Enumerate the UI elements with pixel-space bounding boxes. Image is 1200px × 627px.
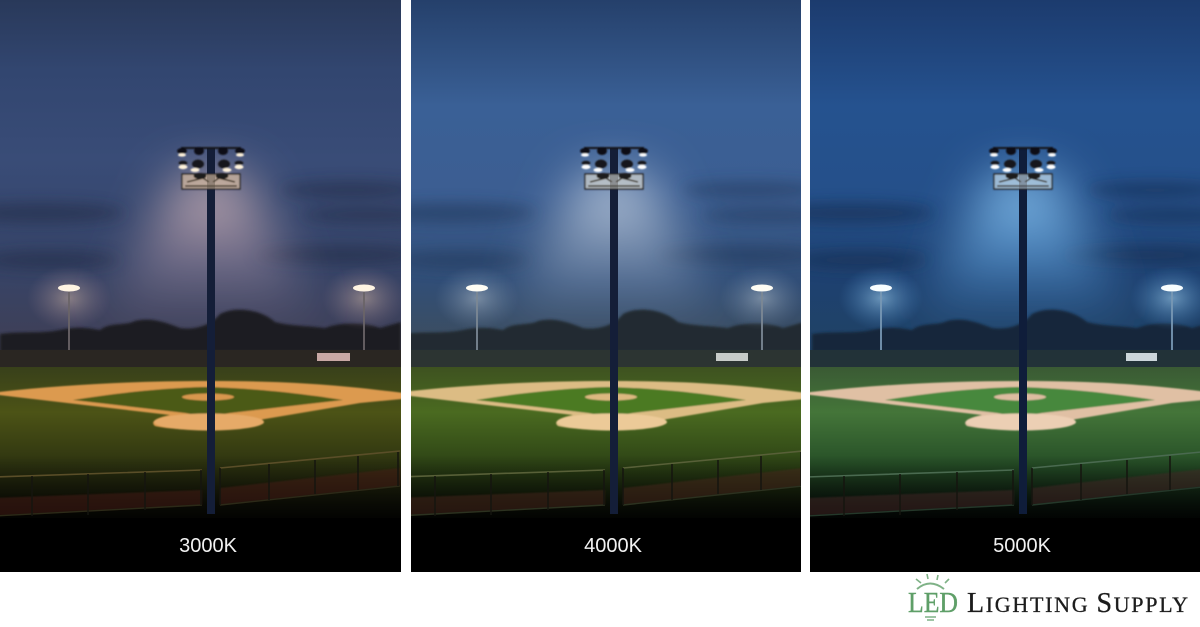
logo: LED Lighting Supply bbox=[908, 574, 1188, 620]
clouds bbox=[366, 182, 841, 269]
tree line bbox=[812, 310, 1200, 352]
outfield fence and sign bbox=[810, 350, 1200, 369]
warning track bbox=[0, 468, 400, 516]
grass bbox=[810, 367, 1200, 518]
warning track bbox=[806, 468, 1200, 516]
main light fixture bbox=[580, 147, 648, 189]
caption: 4000K bbox=[584, 535, 643, 557]
panel: 5000K bbox=[810, 0, 1200, 572]
tree line bbox=[403, 310, 804, 352]
panel: 3000K bbox=[0, 0, 401, 572]
main pole bbox=[1019, 148, 1027, 514]
distant light poles bbox=[839, 266, 1200, 368]
foreground fence bbox=[0, 451, 400, 516]
caption: 5000K bbox=[993, 535, 1052, 557]
main pole bbox=[610, 148, 618, 514]
clouds bbox=[0, 182, 440, 269]
grass bbox=[411, 367, 801, 518]
panel: 4000K bbox=[411, 0, 801, 572]
grass bbox=[0, 367, 401, 518]
light cone bbox=[95, 175, 325, 330]
bottom shade bbox=[411, 455, 801, 519]
infield bbox=[0, 381, 412, 430]
foreground fence bbox=[397, 451, 803, 516]
icon: light bulb rays and base bbox=[916, 574, 949, 620]
bottom shade bbox=[0, 455, 401, 519]
sky bbox=[810, 0, 1200, 352]
tree line bbox=[0, 310, 401, 352]
sky bbox=[411, 0, 801, 352]
main light fixture bbox=[989, 147, 1057, 189]
foreground fence bbox=[806, 451, 1200, 516]
infield bbox=[802, 381, 1200, 430]
logo word: Lighting Supply: LIGHTING SUPPLY bbox=[967, 588, 1188, 619]
outfield fence and sign bbox=[411, 350, 801, 369]
warning track bbox=[397, 468, 803, 516]
caption: 3000K bbox=[179, 535, 238, 557]
light cone bbox=[498, 175, 728, 330]
bottom shade bbox=[810, 455, 1200, 519]
distant light poles bbox=[435, 266, 804, 368]
caption bar bbox=[0, 518, 401, 572]
distant light poles bbox=[27, 266, 406, 368]
caption bar bbox=[411, 518, 801, 572]
infield bbox=[393, 381, 815, 430]
clouds bbox=[765, 182, 1200, 269]
light cone bbox=[907, 175, 1137, 330]
main light fixture bbox=[177, 147, 245, 189]
main pole bbox=[207, 148, 215, 514]
logo word: LED: LED bbox=[908, 587, 958, 619]
caption bar bbox=[810, 518, 1200, 572]
sky bbox=[0, 0, 401, 352]
outfield fence and sign bbox=[0, 350, 401, 369]
